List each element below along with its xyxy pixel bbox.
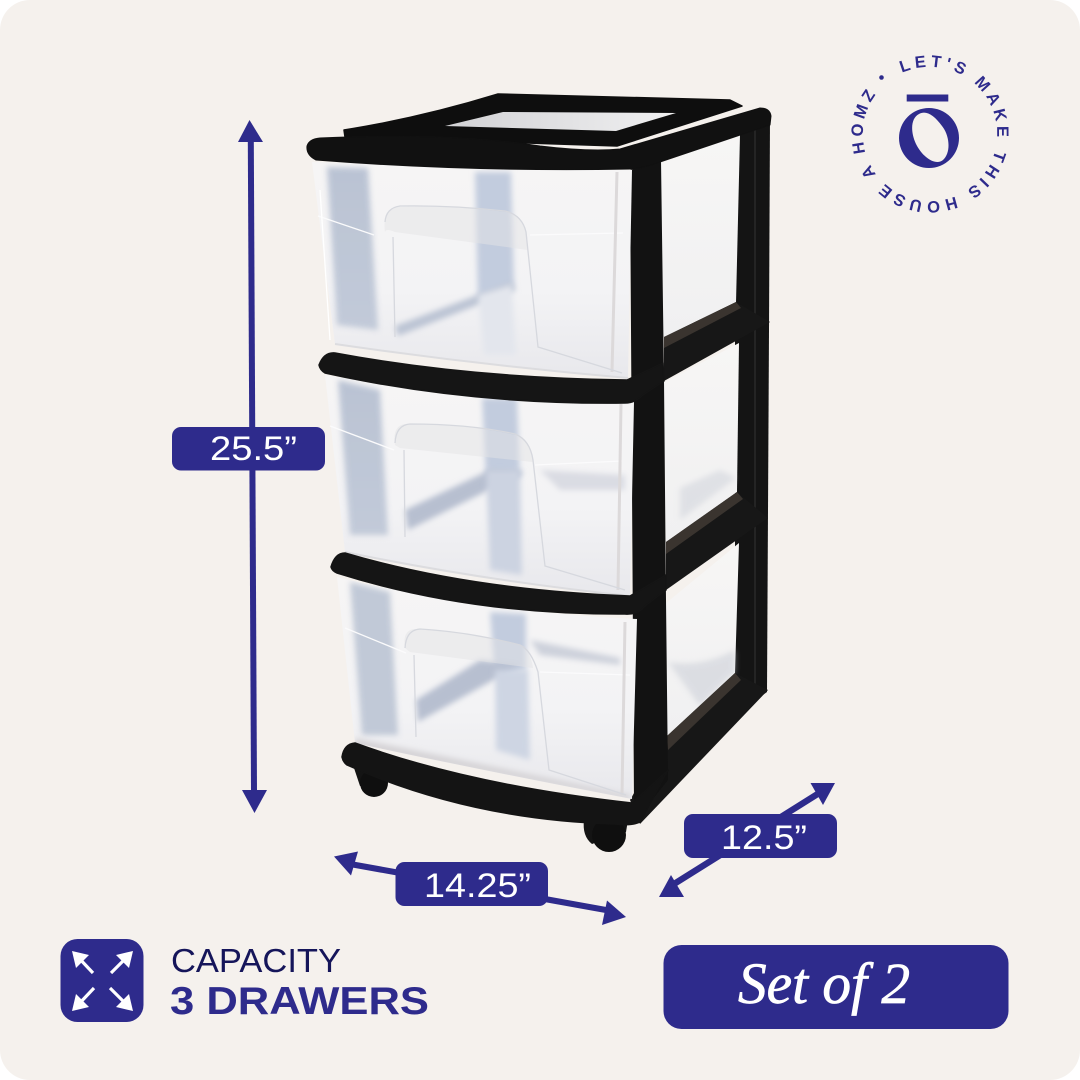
back post bbox=[735, 118, 770, 715]
back post seam bbox=[754, 125, 756, 690]
side window panels bbox=[660, 135, 740, 736]
side rails bbox=[630, 302, 770, 824]
set of 2 badge bbox=[664, 945, 1008, 1029]
icon: expand arrows bbox=[60, 939, 144, 1022]
circular slogan: LET'S MAKE THIS HOUSE A HOMZ bbox=[851, 55, 1009, 213]
drawers count text: 3 DRAWERS bbox=[170, 980, 429, 1023]
casters bbox=[354, 768, 628, 852]
width label bbox=[396, 862, 548, 906]
depth label bbox=[684, 814, 837, 858]
height dimension arrow bbox=[172, 120, 325, 813]
drawer rail 3 bbox=[331, 553, 666, 614]
set of 2 badge: Set of 2 bbox=[738, 951, 910, 1016]
depth label: 12.5” bbox=[721, 819, 807, 857]
lid tray bbox=[344, 94, 742, 146]
bottom rail bbox=[342, 743, 668, 825]
drawer rail 2 bbox=[319, 353, 664, 403]
height label bbox=[172, 427, 325, 470]
top rail bbox=[307, 108, 771, 170]
capacity callout bbox=[60, 939, 429, 1023]
product: three drawer cart bbox=[307, 94, 771, 852]
drawer 2 bbox=[325, 375, 634, 596]
front post bbox=[630, 160, 668, 815]
drawer 3 bbox=[337, 577, 637, 800]
depth dimension arrow bbox=[659, 783, 837, 897]
brand badge bbox=[851, 55, 1009, 213]
logo mark bbox=[899, 94, 959, 168]
capacity text: CAPACITY bbox=[171, 942, 341, 979]
drawer 1 bbox=[312, 162, 632, 378]
width dimension arrow bbox=[334, 852, 626, 925]
width label: 14.25” bbox=[424, 867, 531, 905]
height label: 25.5” bbox=[210, 430, 297, 468]
